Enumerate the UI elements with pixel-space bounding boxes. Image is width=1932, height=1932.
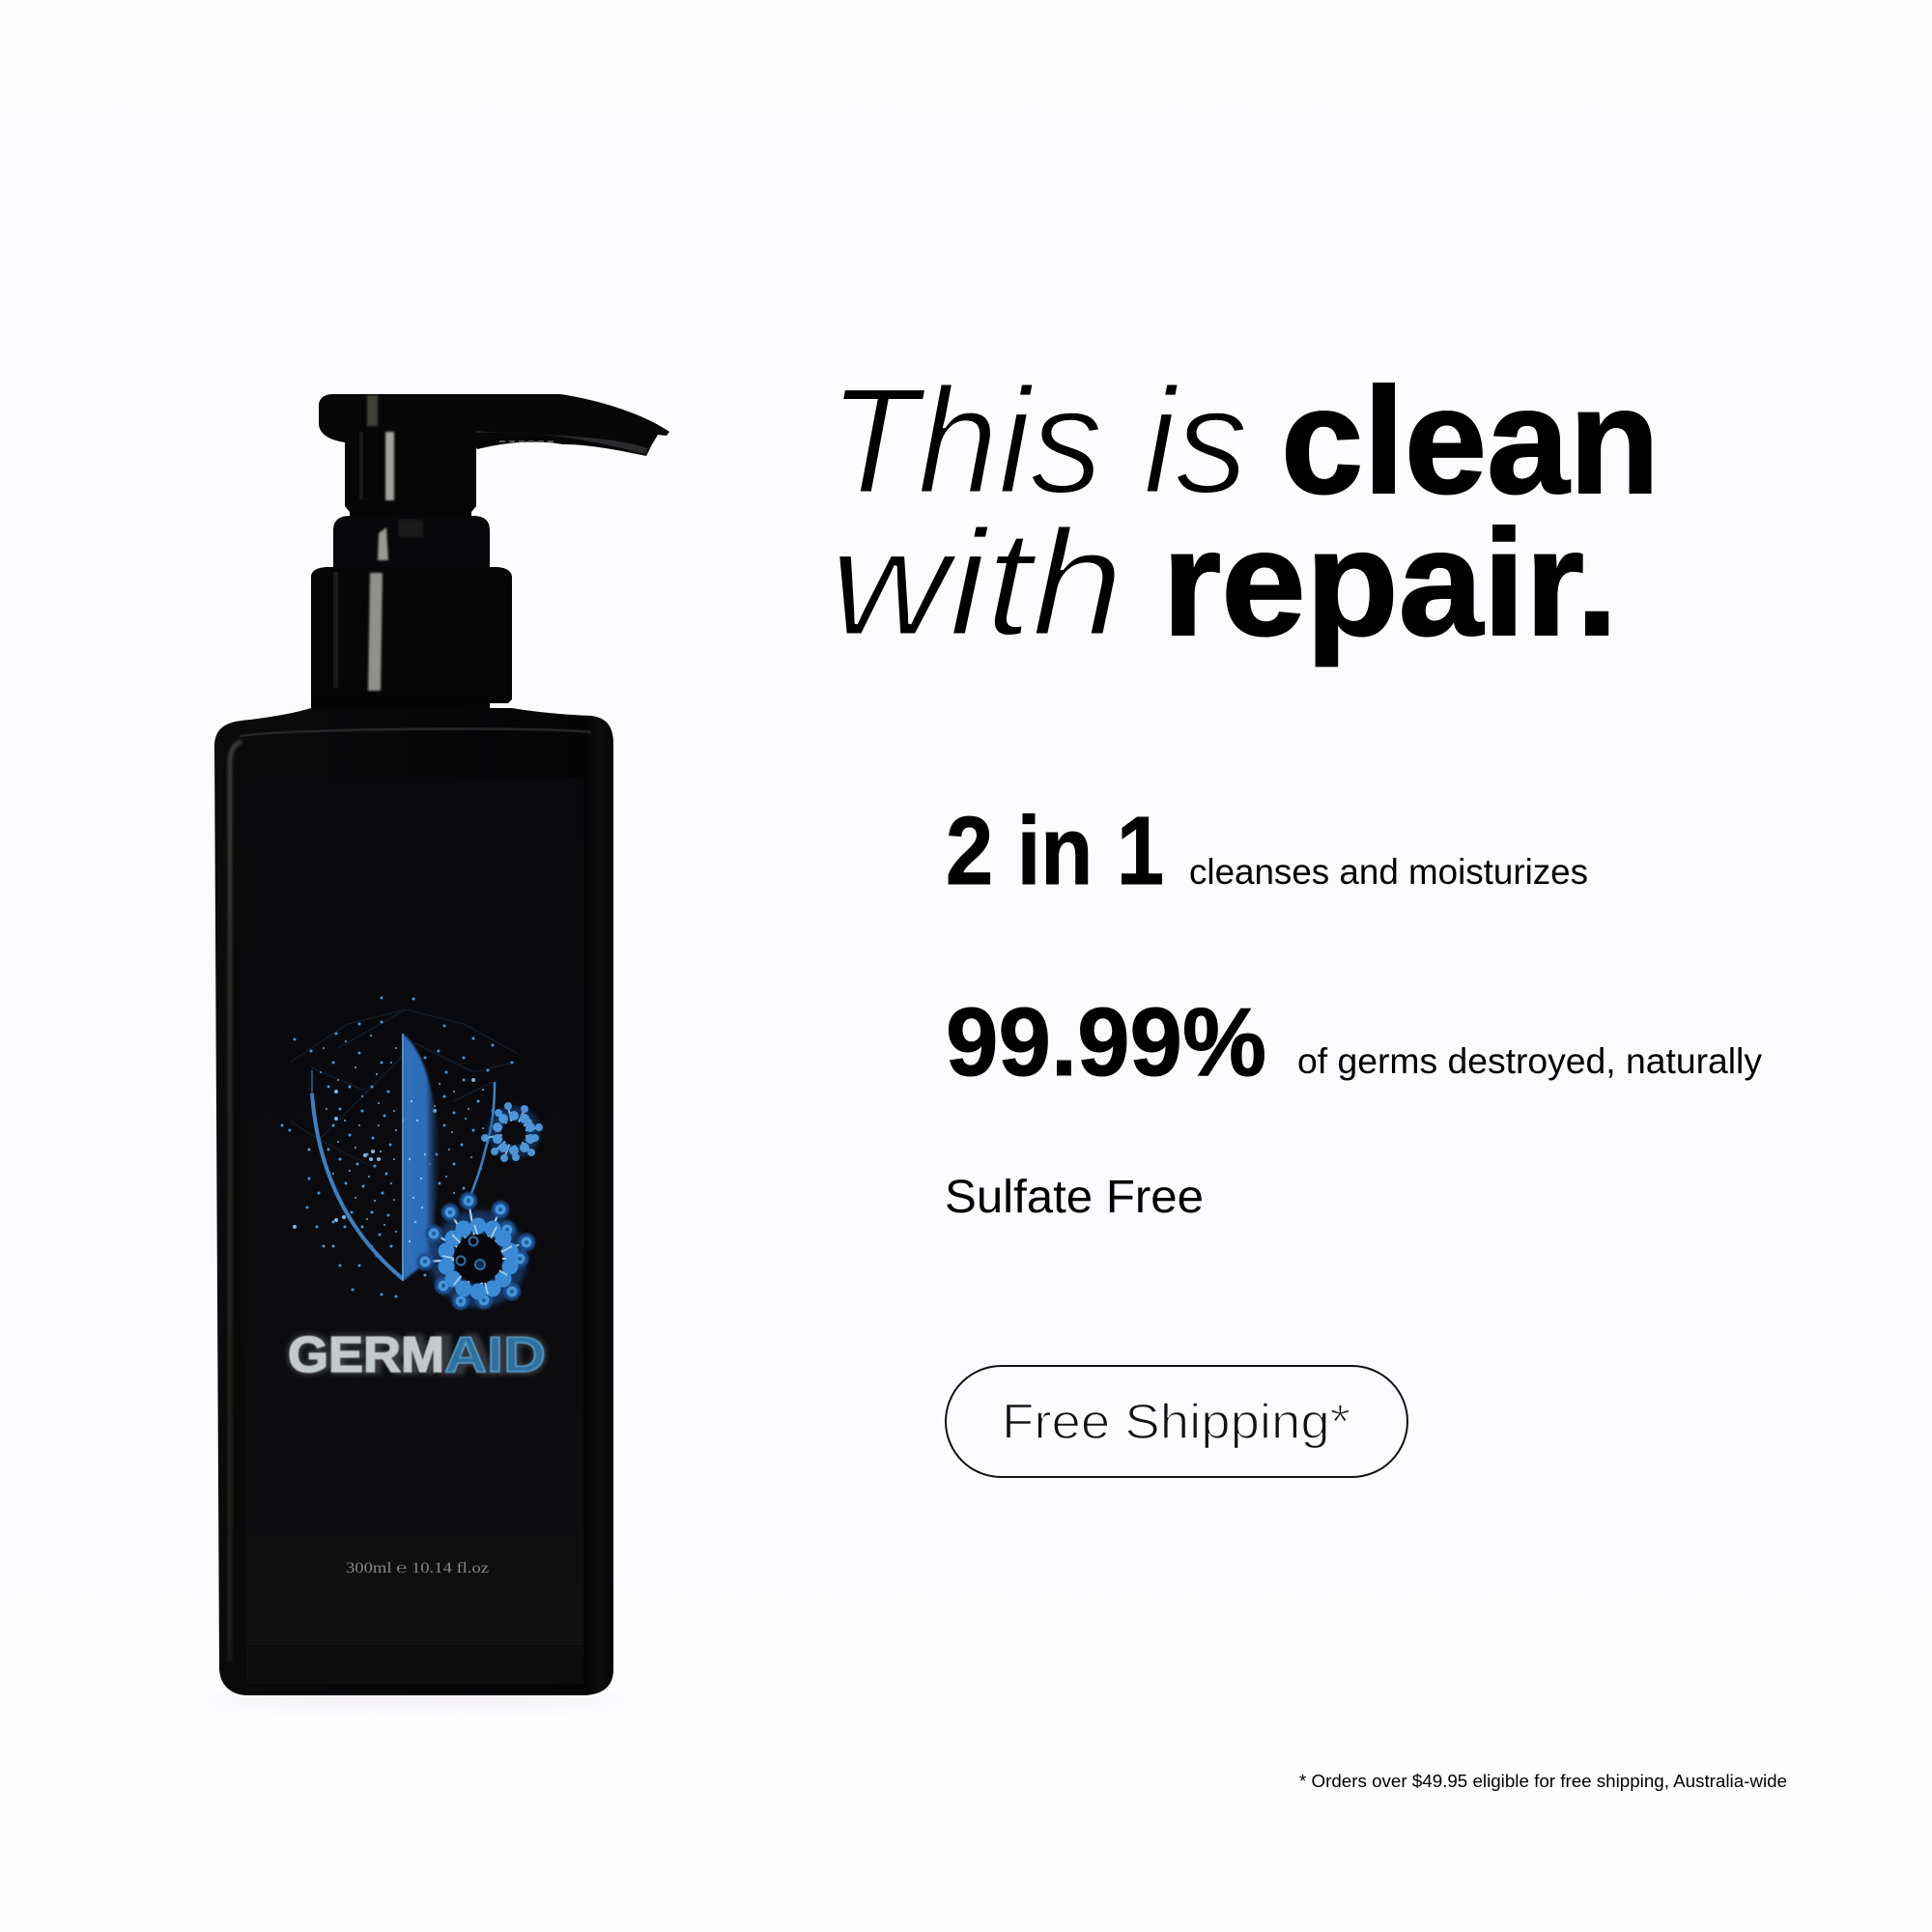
shield left arc [312, 1070, 403, 1279]
body left highlight [230, 742, 242, 1662]
headline [829, 357, 1660, 668]
particles [282, 998, 512, 1296]
network lines [290, 1009, 517, 1169]
claim: 2 in 1 [946, 797, 1588, 905]
lower collar [311, 567, 512, 713]
wordmark: AID [444, 1327, 546, 1383]
bottle body [214, 708, 613, 1695]
footnote: * Orders over $49.95 eligible for free shipping, Australia-wide [1299, 1771, 1787, 1791]
blade particles [410, 1101, 425, 1241]
small virus [485, 1106, 539, 1158]
logo [282, 998, 546, 1383]
headline line 2: repair. [1162, 499, 1618, 668]
shield blade [403, 1034, 440, 1281]
shield right arc [469, 1082, 495, 1201]
wordmark: GERM [288, 1327, 444, 1383]
volume text: 300ml ℮ 10.14 fl.oz [346, 1560, 489, 1577]
headline line 2: with [830, 499, 1123, 668]
bottle [214, 394, 669, 1695]
body top sheen [240, 729, 591, 736]
glow [496, 1114, 532, 1151]
label panel [246, 779, 583, 1652]
claim: 99.99%: of germs destroyed, naturally [1297, 1041, 1762, 1081]
claim: 99.99% [946, 988, 1762, 1096]
claim: sulfate free: Sulfate Free [945, 1172, 1204, 1223]
pump head [319, 394, 669, 456]
floor shadow [198, 1695, 633, 1705]
claim: 99.99%: 99.99% [946, 988, 1266, 1096]
pump stem [345, 430, 476, 520]
glow [441, 1222, 515, 1295]
headline line 1 [829, 357, 1660, 526]
bright particles [295, 1080, 473, 1227]
large virus [425, 1201, 526, 1301]
wordmark: GERMAID [288, 1327, 546, 1383]
claim: 2 in 1: 2 in 1 [946, 797, 1164, 905]
headline line 1: clean [1281, 357, 1660, 526]
lower body shade [246, 1647, 583, 1684]
middle collar [333, 516, 490, 570]
free shipping pill: Free Shipping* [1002, 1394, 1350, 1449]
free shipping pill [946, 1366, 1407, 1477]
headline line 2 [830, 499, 1618, 668]
headline line 1: This is [829, 357, 1248, 526]
claim: 2 in 1: cleanses and moisturizes [1189, 852, 1588, 892]
fine particles [321, 1036, 483, 1265]
